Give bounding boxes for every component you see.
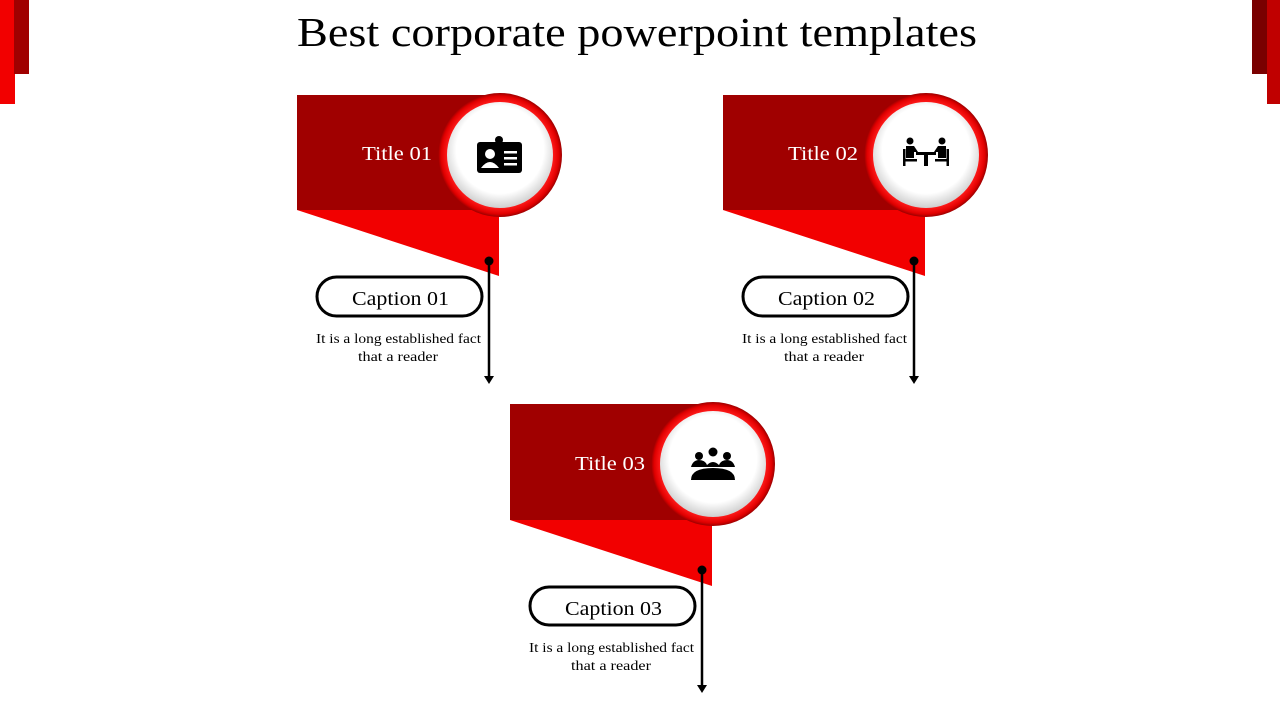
heading: Title 02: Title 02 xyxy=(788,143,858,165)
panel: item 02 xyxy=(723,93,988,384)
icon circle 01 xyxy=(438,93,562,217)
caption pill 03: Caption 03 xyxy=(565,598,662,620)
text block 01: that a reader xyxy=(358,350,438,365)
text block 02 xyxy=(742,332,907,365)
panel: item 01 xyxy=(297,93,562,384)
banner 02 xyxy=(723,95,926,276)
title: Best corporate powerpoint templates xyxy=(297,9,977,55)
caption pill 01: Caption 01 xyxy=(352,288,449,310)
banner 03 xyxy=(510,404,713,586)
icon circle 02 xyxy=(864,93,988,217)
text block 01 xyxy=(316,332,481,365)
corner decoration right xyxy=(1252,0,1280,104)
caption pill 03 xyxy=(530,587,695,625)
heading: Title 01: Title 01 xyxy=(362,143,432,165)
text block 02: that a reader xyxy=(784,350,864,365)
panel: item 03 xyxy=(510,402,775,693)
heading: Title 03: Title 03 xyxy=(575,453,645,475)
text block 01: It is a long established fact xyxy=(316,332,481,347)
arrow 03 xyxy=(697,566,707,693)
caption pill 02 xyxy=(743,277,908,316)
caption pill 01 xyxy=(317,277,482,316)
banner 01 xyxy=(297,95,500,276)
icon circle 03 xyxy=(651,402,775,526)
text block 03: It is a long established fact xyxy=(529,641,694,656)
corner decoration left xyxy=(0,0,29,104)
text block 03 xyxy=(529,641,694,674)
text block 03: that a reader xyxy=(571,659,651,674)
arrow 02 xyxy=(909,256,919,384)
arrow 01 xyxy=(484,256,494,384)
text block 02: It is a long established fact xyxy=(742,332,907,347)
caption pill 02: Caption 02 xyxy=(778,288,875,310)
